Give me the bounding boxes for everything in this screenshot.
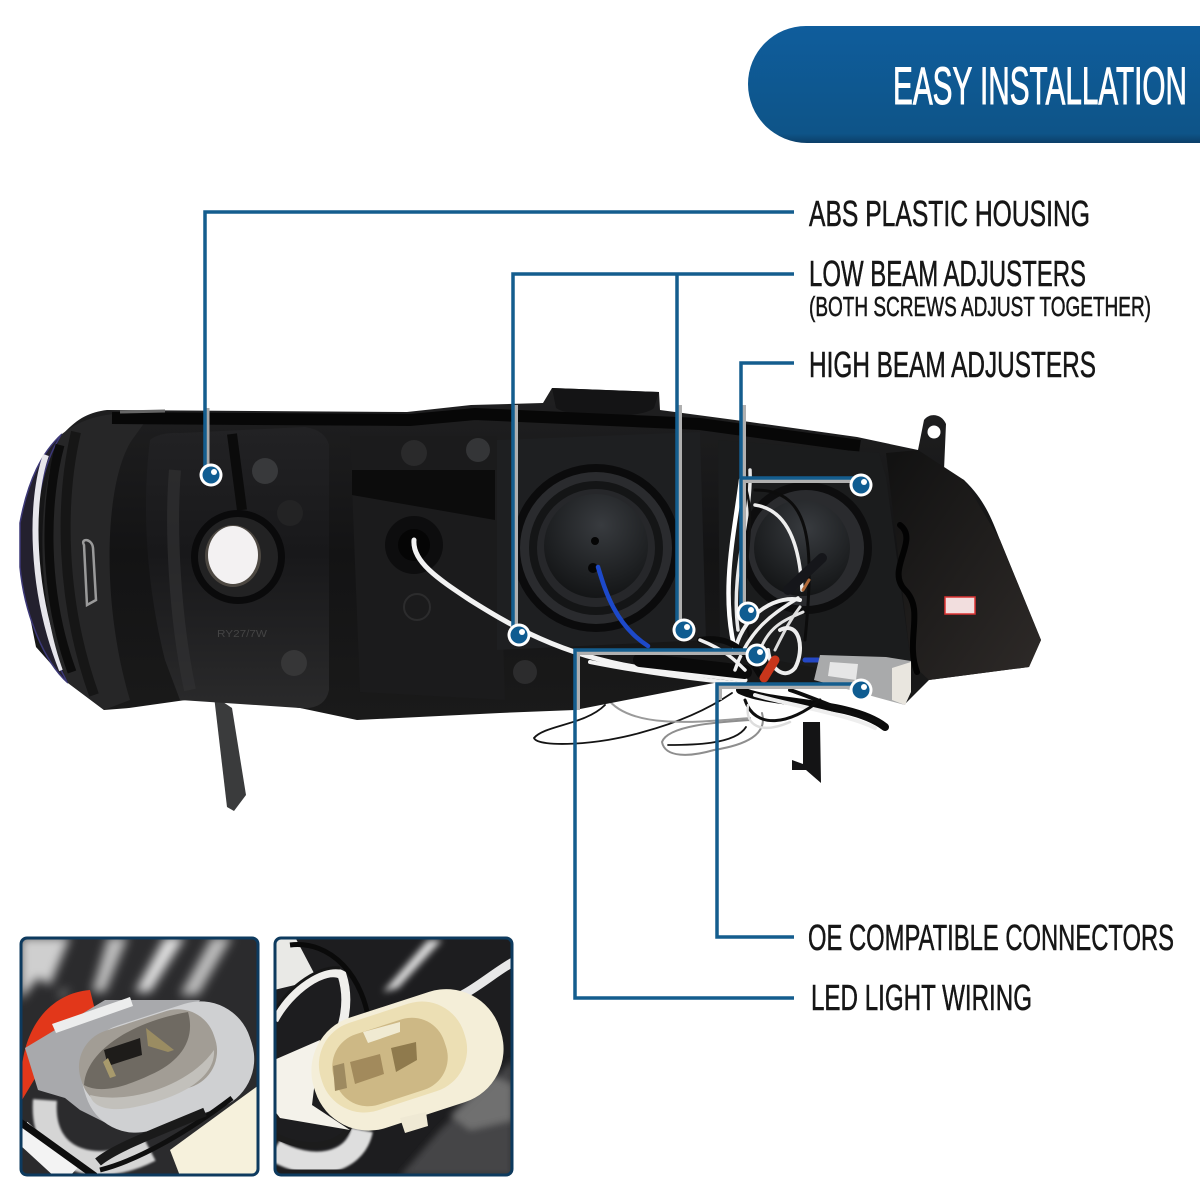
wiring connector: gray	[814, 655, 911, 705]
high beam boot	[740, 482, 872, 614]
wire loop left	[276, 969, 350, 1024]
panel: high beam	[718, 440, 911, 676]
connector cavity	[332, 1018, 448, 1106]
callout line: LED light wiring	[575, 650, 794, 998]
connector cavity	[79, 1009, 217, 1098]
callout line: OE compatible connectors	[717, 684, 855, 937]
mounting bracket: lower right	[792, 722, 821, 783]
panel: cream connector closeup	[274, 937, 518, 1176]
callout line: high beam adjusters	[741, 363, 855, 607]
wire bundle	[414, 470, 917, 728]
label: low beam adjusters	[809, 253, 1151, 322]
top rim highlight	[112, 414, 860, 446]
white body top left	[274, 937, 315, 990]
cream body	[274, 1040, 350, 1130]
QC sticker	[945, 597, 975, 614]
panel: low beam	[497, 432, 706, 650]
right wing	[886, 450, 1041, 680]
bulb socket: white	[191, 510, 285, 604]
panel: gray connector closeup	[20, 937, 268, 1176]
white wire right	[460, 958, 510, 995]
embossed bulb text: RY27/7W	[217, 629, 268, 640]
red wire	[21, 990, 95, 1100]
mounting bracket: lower left	[214, 696, 246, 811]
connector lip	[82, 1001, 254, 1133]
callout line: low beam adjusters	[513, 274, 794, 630]
connector lip	[312, 989, 504, 1131]
pins	[252, 438, 537, 684]
cream housing	[170, 1085, 259, 1176]
white wires	[45, 1100, 150, 1163]
connector cavity lip	[319, 1002, 467, 1112]
tab hole	[928, 426, 940, 438]
low beam boot	[512, 464, 680, 632]
black wires	[100, 1098, 232, 1170]
filler cap	[552, 388, 659, 416]
terminals	[333, 1022, 417, 1091]
panel: turn signal bulb	[146, 427, 329, 708]
panel: side marker	[350, 436, 505, 700]
label: LED light wiring: LED LIGHT WIRING	[811, 977, 1032, 1018]
side marker socket	[385, 516, 443, 574]
product photo: headlight rear view	[20, 388, 1041, 811]
lens edge: left	[20, 434, 68, 683]
terminals	[104, 1038, 142, 1066]
connector tube	[25, 1000, 200, 1130]
title banner: easy installation	[748, 26, 1200, 143]
latch tab	[402, 1114, 428, 1133]
bezel bands	[42, 414, 150, 710]
hanging wire loops	[534, 693, 763, 755]
dark wire arc	[290, 942, 370, 1012]
callout dots	[200, 464, 872, 702]
housing silhouette	[20, 388, 1041, 720]
callout line: ABS plastic housing	[205, 212, 794, 470]
white wire bundle bottom	[274, 1130, 362, 1163]
label strip	[52, 997, 133, 1033]
